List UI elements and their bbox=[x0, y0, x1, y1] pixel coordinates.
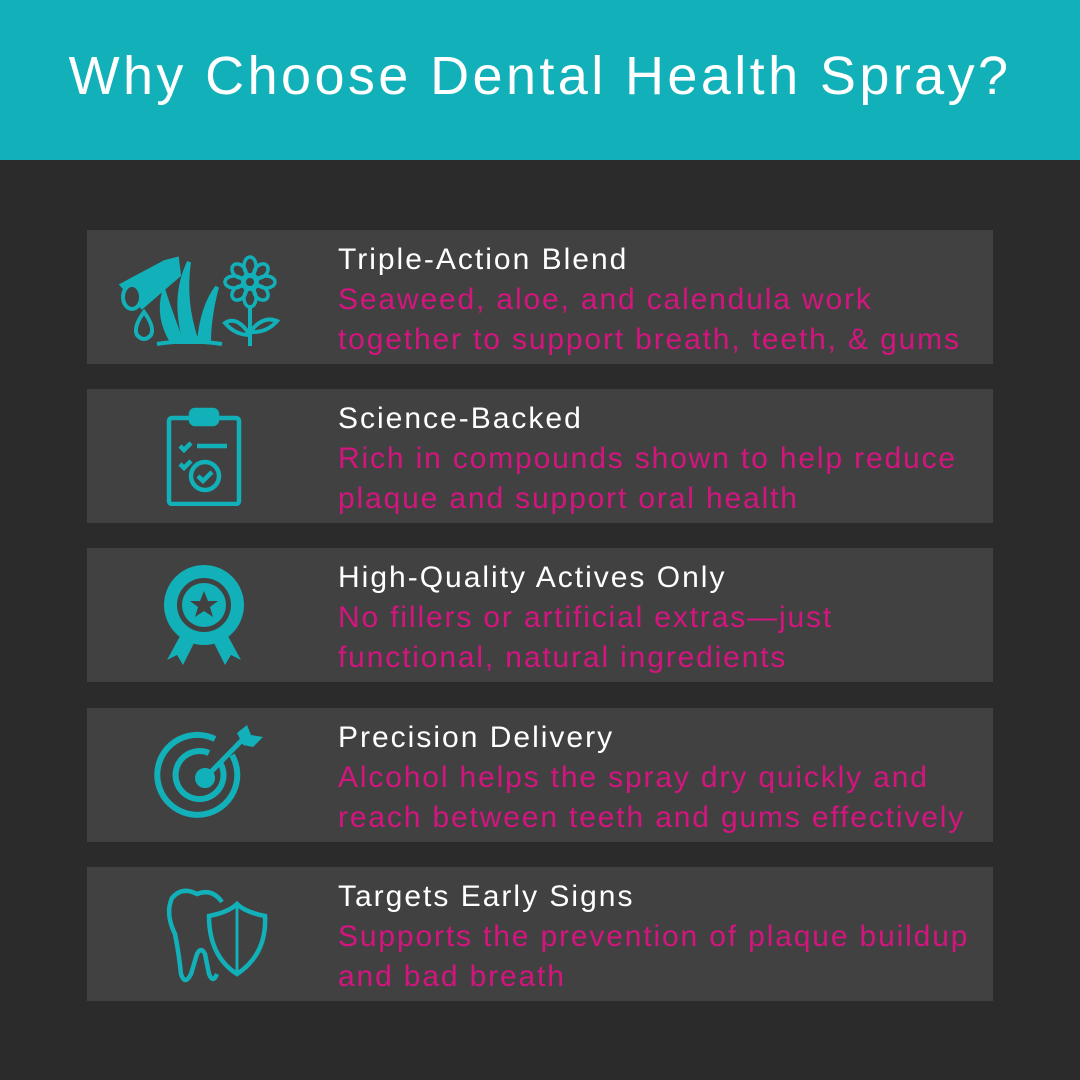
icon: seaweed aloe flower bbox=[118, 255, 280, 346]
text block: and bad breath bbox=[338, 960, 566, 993]
text block: Science-Backed bbox=[338, 402, 583, 435]
text block: Alcohol helps the spray dry quickly and bbox=[338, 761, 929, 794]
text block: Seaweed, aloe, and calendula work bbox=[338, 283, 873, 316]
text block: Rich in compounds shown to help reduce bbox=[338, 442, 957, 475]
text block: No fillers or artificial extras—just bbox=[338, 601, 833, 634]
panel: high-quality actives bbox=[87, 548, 993, 682]
text block: Triple-Action Blend bbox=[338, 243, 628, 276]
title: Why Choose Dental Health Spray? bbox=[69, 46, 1011, 106]
text block: High-Quality Actives Only bbox=[338, 561, 726, 594]
panel: targets early signs bbox=[87, 867, 993, 1001]
text block: plaque and support oral health bbox=[338, 482, 799, 515]
panel: triple-action blend bbox=[87, 230, 993, 364]
text block: Targets Early Signs bbox=[338, 880, 634, 913]
icon: target with arrow bbox=[154, 725, 263, 818]
text block bbox=[338, 243, 961, 356]
text block bbox=[338, 402, 957, 515]
panel: science-backed bbox=[87, 389, 993, 523]
icon: tooth with shield bbox=[166, 888, 268, 982]
text block: reach between teeth and gums effectively bbox=[338, 801, 965, 834]
icon: clipboard check bbox=[166, 408, 242, 506]
text block: Precision Delivery bbox=[338, 721, 614, 754]
text block bbox=[338, 721, 965, 834]
text block bbox=[338, 561, 833, 674]
text block: Supports the prevention of plaque buildup bbox=[338, 920, 969, 953]
header banner bbox=[0, 0, 1080, 160]
panel: precision delivery bbox=[87, 708, 993, 842]
text block bbox=[338, 880, 969, 993]
text block: functional, natural ingredients bbox=[338, 641, 787, 674]
text block: together to support breath, teeth, & gums bbox=[338, 323, 961, 356]
icon: award ribbon bbox=[164, 565, 244, 665]
